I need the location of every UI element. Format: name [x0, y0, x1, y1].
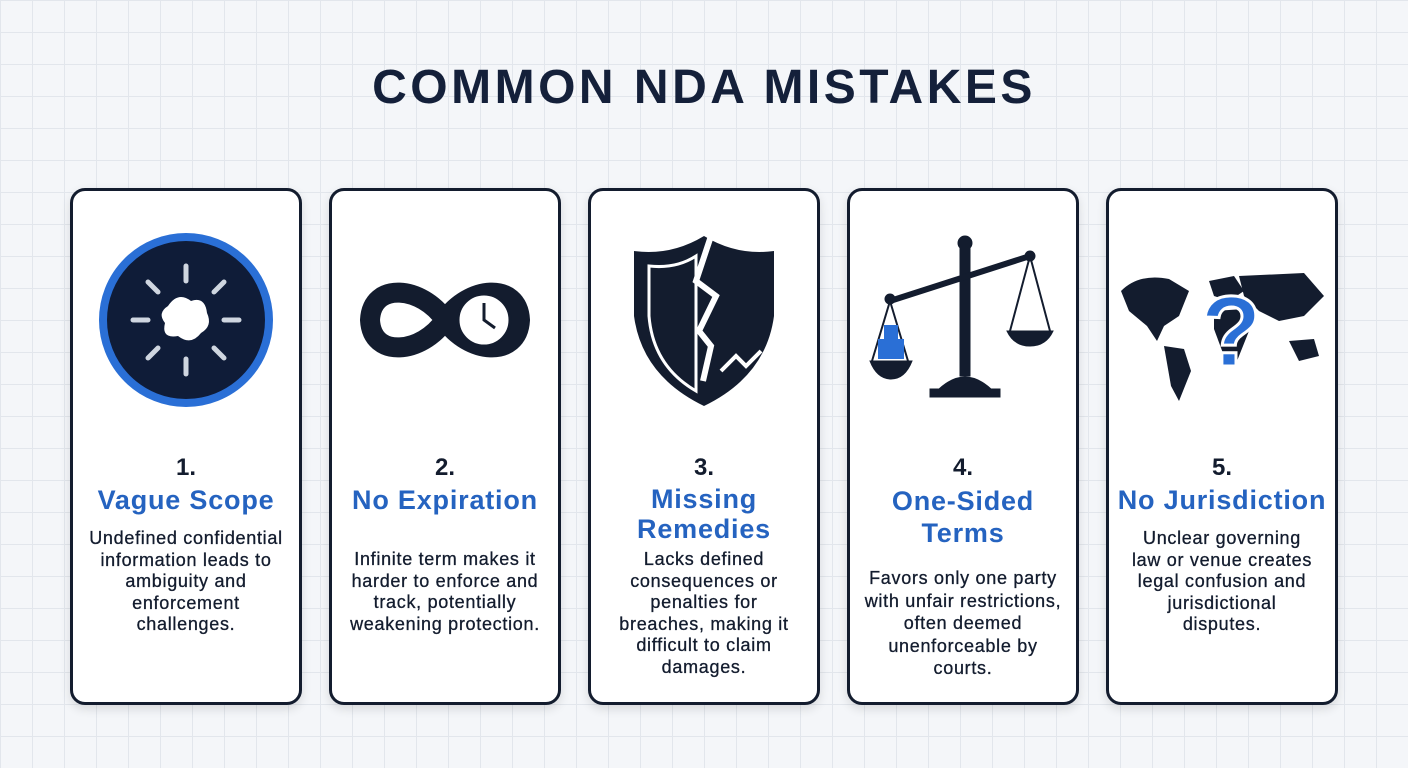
body text: harder to enforce and [352, 571, 538, 591]
icon: world map with question mark: ? [1200, 276, 1262, 388]
panel: vague scope [70, 188, 302, 705]
body text [864, 568, 1061, 678]
panel: missing remedies [588, 188, 820, 705]
body text: Undefined confidential [89, 528, 283, 548]
body text: difficult to claim [636, 635, 772, 655]
body text: disputes. [1183, 614, 1261, 634]
body text [619, 549, 789, 678]
heading: One-Sided [892, 486, 1034, 516]
body text: ambiguity and [125, 571, 247, 591]
heading: No Jurisdiction [1118, 485, 1326, 515]
heading [637, 484, 771, 544]
body text [1132, 528, 1312, 634]
body text: unenforceable by [888, 636, 1038, 656]
number: 5. [1212, 454, 1232, 481]
icon: broken shield [634, 236, 774, 406]
number: 1. [176, 454, 196, 481]
heading: Terms [921, 518, 1005, 548]
panel: no jurisdiction [1106, 188, 1338, 705]
number: 2. [435, 454, 455, 481]
heading: Vague Scope [98, 485, 274, 515]
body text: challenges. [137, 614, 235, 634]
heading: No Expiration [352, 485, 538, 515]
number: 3. [694, 454, 714, 481]
body text [89, 528, 283, 634]
body text: jurisdictional [1168, 593, 1276, 613]
body text: information leads to [100, 550, 272, 570]
body text: with unfair restrictions, [865, 590, 1061, 610]
body text: often deemed [904, 613, 1022, 633]
panel: one-sided terms [847, 188, 1079, 705]
body text: Lacks defined [644, 549, 764, 569]
body text: penalties for [650, 592, 758, 612]
body text: consequences or [630, 571, 778, 591]
icon: world map with question mark [1121, 273, 1324, 401]
body text: breaches, making it [619, 614, 789, 634]
heading [892, 486, 1034, 548]
body text: legal confusion and [1138, 571, 1306, 591]
icon: infinity with clock [360, 282, 530, 358]
title: COMMON NDA MISTAKES [372, 61, 1036, 114]
body text: weakening protection. [350, 614, 540, 634]
body text: track, potentially [374, 592, 516, 612]
body text: damages. [662, 657, 746, 677]
heading: Remedies [637, 514, 771, 544]
heading: Missing [651, 484, 757, 514]
body text: courts. [934, 658, 992, 678]
icon: blurry burst [99, 233, 273, 407]
body text: Favors only one party [869, 568, 1057, 588]
icon: unbalanced scale [869, 236, 1054, 398]
body text: Infinite term makes it [354, 549, 536, 569]
body text: enforcement [132, 593, 240, 613]
body text: Unclear governing [1143, 528, 1301, 548]
panel: no expiration [329, 188, 561, 705]
number: 4. [953, 454, 973, 481]
body text: law or venue creates [1132, 550, 1312, 570]
body text [350, 549, 540, 634]
